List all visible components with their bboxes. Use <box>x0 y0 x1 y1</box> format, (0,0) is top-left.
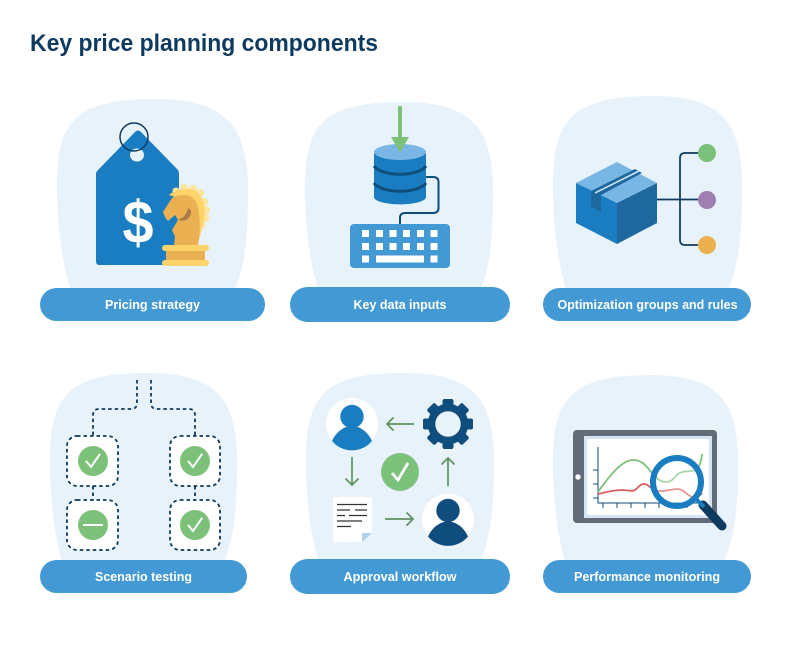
icon: database <box>374 144 426 204</box>
label: performance monitoring: Performance monitoring <box>574 569 720 584</box>
background blob <box>553 96 742 300</box>
connector lines <box>657 153 698 245</box>
scenario: bottom left <box>67 500 118 550</box>
panel: optimization groups and rules <box>543 96 751 321</box>
cable <box>400 177 438 224</box>
label: pricing strategy <box>40 288 265 321</box>
icon: price tag: $ <box>122 189 154 256</box>
icon: box <box>576 162 657 244</box>
panel: pricing strategy <box>40 99 265 321</box>
arrow: gear to person <box>387 418 414 430</box>
icon: document <box>333 497 372 542</box>
title: Key price planning components <box>30 30 378 57</box>
background blob <box>57 99 248 300</box>
line chart <box>593 447 703 508</box>
node: purple <box>698 191 716 209</box>
node: green <box>698 144 716 162</box>
icon: price tag <box>96 123 179 265</box>
label: optimization groups and rules: Optimization groups and rules <box>558 297 738 312</box>
label: approval workflow: Approval workflow <box>344 569 457 584</box>
scenario: top left <box>67 436 118 486</box>
panel: key data inputs <box>290 102 510 322</box>
label: scenario testing: Scenario testing <box>95 569 192 584</box>
label: performance monitoring <box>543 560 751 593</box>
icon: keyboard <box>350 224 450 268</box>
arrow: document to reviewer <box>385 512 413 526</box>
background blob <box>50 373 237 572</box>
label: scenario testing <box>40 560 247 593</box>
panel: performance monitoring <box>543 375 751 593</box>
scenario: bottom right <box>170 500 220 550</box>
icon: approval check <box>381 453 419 491</box>
scenario: top right <box>170 436 220 486</box>
icon: tablet <box>573 430 717 523</box>
icon: gear <box>423 399 473 449</box>
label: key data inputs <box>290 287 510 322</box>
arrow: reviewer to gear <box>442 458 454 486</box>
panel: approval workflow <box>290 373 510 594</box>
dashed connectors <box>93 380 195 500</box>
label: optimization groups and rules <box>543 288 751 321</box>
label: approval workflow <box>290 559 510 594</box>
icon: dark person <box>422 494 474 546</box>
icon: green down arrow <box>391 106 409 153</box>
icon: magnifying glass <box>653 458 722 526</box>
label: pricing strategy: Pricing strategy <box>105 297 201 312</box>
background blob <box>306 373 494 572</box>
node: orange <box>698 236 716 254</box>
panel: scenario testing <box>40 373 247 593</box>
icon: blue person <box>326 398 378 450</box>
label: key data inputs: Key data inputs <box>354 297 446 312</box>
background blob <box>553 375 738 572</box>
background blob <box>305 102 493 300</box>
arrow: person to document <box>346 457 358 485</box>
icon: chess knight <box>162 184 210 266</box>
